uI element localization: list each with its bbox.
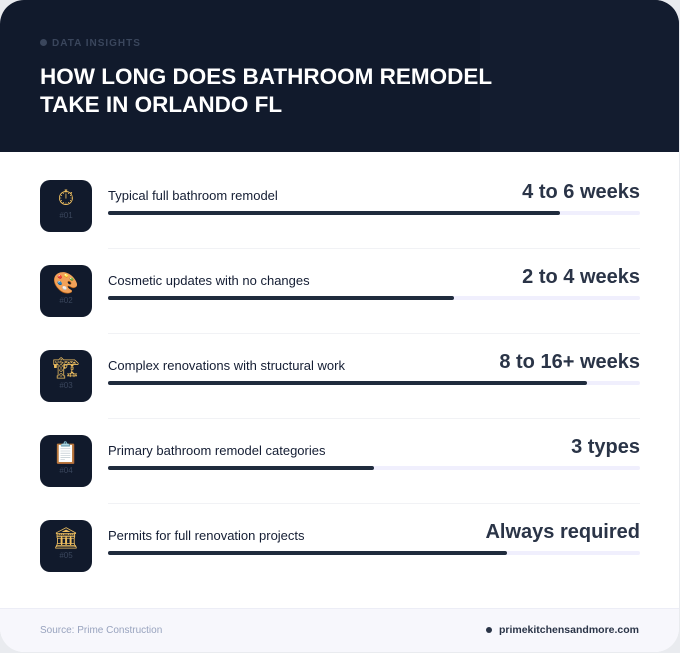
footer [0, 608, 679, 653]
row 3 [40, 350, 640, 402]
website: primekitchensandmore.com [499, 624, 639, 636]
row 1 [40, 180, 640, 232]
icon: crane: #03 [59, 381, 73, 390]
row 3: Complex renovations with structural work [108, 358, 345, 373]
title: TAKE IN ORLANDO FL [40, 92, 282, 117]
icon: stopwatch: #01 [59, 211, 73, 220]
bar 1 [108, 211, 640, 215]
row 5: Permits for full renovation projects [108, 528, 305, 543]
icon: crane [40, 350, 92, 402]
icon: palette: #02 [59, 296, 73, 305]
bar 5 [108, 551, 640, 555]
row 4: 3 types [571, 436, 640, 458]
row 4 [40, 435, 640, 487]
icon: building: #05 [59, 551, 73, 560]
row 1: Typical full bathroom remodel [108, 188, 278, 203]
row 5: Always required [485, 521, 640, 543]
row 2 [40, 265, 640, 317]
row 2: Cosmetic updates with no changes [108, 273, 310, 288]
icon: clipboard: 📋 [53, 441, 79, 465]
row 4: Primary bathroom remodel categories [108, 443, 325, 458]
icon: building: 🏛 [53, 526, 79, 550]
row 1: 4 to 6 weeks [522, 181, 640, 203]
bar 3 [108, 381, 640, 385]
title: HOW LONG DOES BATHROOM REMODEL [40, 64, 492, 89]
row 3: 8 to 16+ weeks [499, 351, 640, 373]
icon: palette: 🎨 [53, 271, 79, 295]
row 5 [40, 520, 640, 572]
bar 2 [108, 296, 640, 300]
icon: building [40, 520, 92, 572]
icon: crane: 🏗 [53, 356, 79, 380]
source: Source: Prime Construction [40, 625, 162, 636]
icon: palette [40, 265, 92, 317]
tag: data insights: DATA INSIGHTS [52, 38, 141, 49]
icon: clipboard: #04 [59, 466, 73, 475]
title [40, 64, 492, 117]
icon: stopwatch [40, 180, 92, 232]
icon: clipboard [40, 435, 92, 487]
header [0, 0, 679, 152]
row 2: 2 to 4 weeks [522, 266, 640, 288]
bar 4 [108, 466, 640, 470]
icon: stopwatch: ⏱ [58, 186, 74, 210]
